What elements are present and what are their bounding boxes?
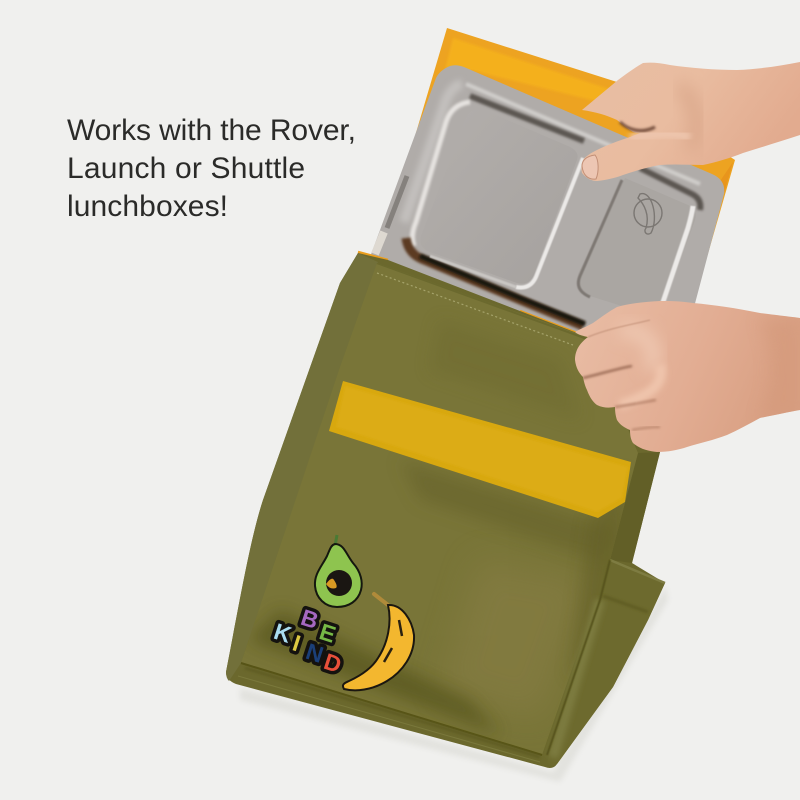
hand shading bbox=[620, 330, 654, 370]
patch: BE KIND: K bbox=[271, 618, 295, 648]
stainless steel lunchbox bbox=[366, 65, 724, 345]
caption text: Works with the Rover, bbox=[67, 114, 356, 147]
patch: BE KIND: I bbox=[290, 630, 304, 656]
patch: BE KIND: N bbox=[303, 638, 327, 668]
top stitching bbox=[377, 273, 573, 345]
outer rim sheen bbox=[404, 84, 462, 222]
upper hand holding lunchbox bbox=[581, 62, 800, 181]
large compartment panel bbox=[514, 249, 542, 284]
left gusset bbox=[226, 253, 378, 681]
yellow velcro strap bbox=[329, 381, 631, 518]
orange insulated sleeve bbox=[390, 28, 735, 320]
caption text: lunchboxes! bbox=[67, 190, 228, 223]
light ridge above groove bbox=[466, 84, 700, 184]
patch: BE KIND bbox=[271, 604, 345, 678]
compartment divider ridge bbox=[516, 158, 583, 288]
soft shadow on the table bbox=[240, 586, 668, 782]
finger creases bbox=[588, 320, 650, 337]
orange lining rim bbox=[358, 252, 590, 338]
side pocket bbox=[547, 560, 665, 766]
right gusset bbox=[610, 452, 660, 563]
patch: BE KIND: B bbox=[298, 604, 322, 634]
hinge clip bbox=[387, 176, 407, 228]
front panel bbox=[241, 263, 638, 755]
dark recess groove bbox=[470, 96, 700, 210]
olive lunch bag bbox=[226, 252, 668, 782]
caption text bbox=[67, 114, 356, 223]
patch: BE KIND: E bbox=[316, 618, 339, 648]
printed patches bbox=[271, 535, 414, 690]
panel shading bbox=[430, 320, 580, 420]
patch: BE KIND: D bbox=[321, 648, 345, 678]
right edge highlight bbox=[662, 206, 693, 305]
patch: banana bbox=[343, 594, 414, 690]
planet logo bbox=[634, 194, 662, 234]
bag silhouette bbox=[226, 253, 665, 768]
caption text: Launch or Shuttle bbox=[67, 152, 305, 185]
bottom panel seam bbox=[241, 663, 542, 755]
knuckle shading bbox=[680, 85, 697, 150]
patch: avocado bbox=[315, 535, 362, 607]
thumbnail bbox=[582, 155, 598, 179]
brown and black shadow above bag bbox=[406, 238, 583, 326]
small compartment panel bbox=[578, 178, 696, 318]
lower hand gripping bag bbox=[575, 301, 800, 452]
inner left ridge bbox=[412, 102, 470, 246]
